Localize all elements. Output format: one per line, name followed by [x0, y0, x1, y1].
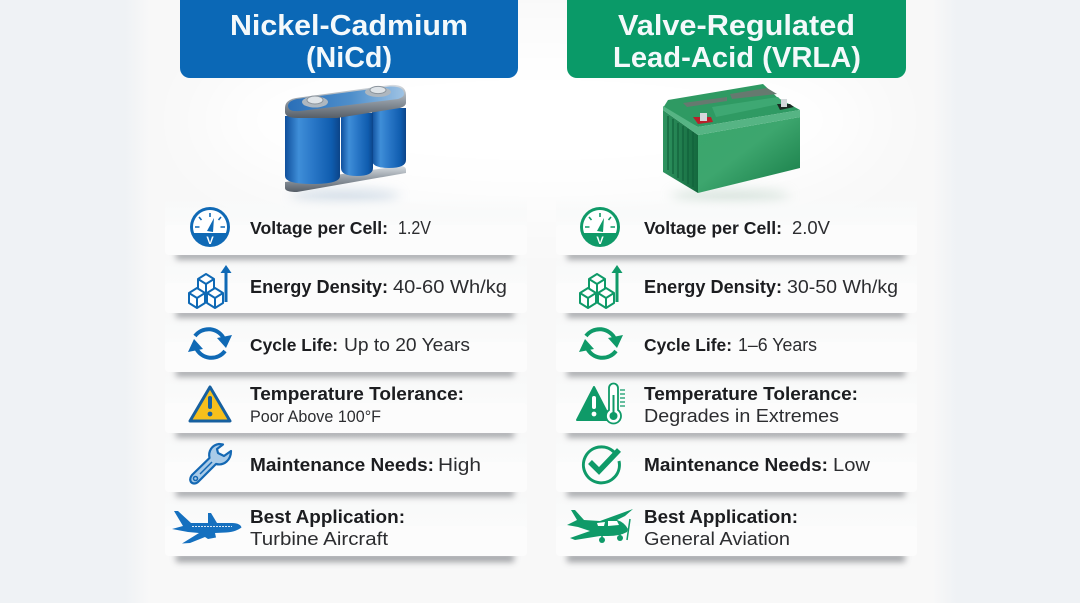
icon: cycle arrows: [188, 329, 232, 358]
row: Maintenance Needs: [165, 433, 527, 498]
row: Maintenance Needs: High: [438, 454, 481, 475]
icon: cubes with arrow: [189, 265, 232, 308]
row: Energy Density: [165, 255, 527, 319]
heading: Nickel-Cadmium: Nickel-Cadmium: [230, 10, 468, 42]
row: Voltage per Cell: Voltage per Cell:: [250, 218, 388, 238]
row: Voltage per Cell: [556, 197, 917, 261]
icon: VRLA battery: [663, 84, 800, 202]
row: Temperature Tolerance: Temperature Tolerance:: [250, 383, 464, 404]
row: Energy Density: Energy Density:: [250, 276, 388, 297]
row: Voltage per Cell: 1.2V: [398, 217, 432, 238]
panel: VRLA column: [556, 0, 917, 562]
row: Best Application: General Aviation: [644, 528, 790, 549]
row: Temperature Tolerance: [556, 372, 917, 439]
panel: NiCd column: [165, 0, 527, 562]
row: Temperature Tolerance: Temperature Tolerance:: [644, 383, 858, 404]
row: Cycle Life: 1–6 Years: [738, 334, 817, 355]
row: Energy Density: 30-50 Wh/kg: [787, 276, 898, 297]
icon: warning with thermometer: [577, 384, 625, 423]
heading: Valve-Regulated Lead-Acid: Lead-Acid (VRLA): [613, 42, 861, 74]
icon: cycle arrows: [579, 329, 623, 358]
row: Temperature Tolerance: [165, 372, 527, 439]
icon: warning triangle: [190, 387, 230, 421]
row: Cycle Life: [556, 313, 917, 378]
row: Best Application: Best Application:: [250, 506, 405, 527]
icon: NiCd battery: [285, 85, 406, 202]
row: Energy Density: Energy Density:: [644, 276, 782, 297]
row: Cycle Life: [165, 313, 527, 378]
row: Maintenance Needs: Low: [833, 454, 871, 475]
row: Voltage per Cell: Voltage per Cell:: [644, 218, 782, 238]
row: Cycle Life: Up to 20 Years: [344, 334, 470, 355]
icon: gauge: V: [596, 235, 604, 247]
icon: gauge: V: [206, 235, 214, 247]
icon: wrench: [190, 444, 231, 484]
row: Best Application: [165, 492, 527, 562]
row: Energy Density: [556, 255, 917, 319]
row: Best Application: [556, 492, 917, 562]
row: Temperature Tolerance: Poor Above 100°F: [250, 407, 381, 426]
heading: Valve-Regulated Lead-Acid: [567, 0, 906, 78]
row: Cycle Life: Cycle Life:: [250, 335, 338, 355]
row: Cycle Life: Cycle Life:: [644, 335, 732, 355]
row: Best Application: Turbine Aircraft: [250, 528, 388, 549]
icon: check circle: [583, 447, 619, 483]
row: Maintenance Needs: [556, 433, 917, 498]
row: Maintenance Needs: Maintenance Needs:: [250, 454, 434, 475]
heading: Nickel-Cadmium: (NiCd): [306, 42, 392, 74]
icon: gauge: [190, 207, 230, 247]
icon: gauge: [580, 207, 620, 247]
icon: airliner: [172, 511, 242, 544]
row: Best Application: Best Application:: [644, 506, 798, 527]
icon: light aircraft: [567, 509, 633, 543]
row: Maintenance Needs: Maintenance Needs:: [644, 454, 828, 475]
row: Voltage per Cell: 2.0V: [792, 217, 831, 238]
icon: cubes with arrow: [580, 265, 622, 308]
row: Temperature Tolerance: Degrades in Extremes: [644, 405, 839, 426]
heading: Valve-Regulated Lead-Acid: Valve-Regulated: [618, 10, 855, 42]
row: Voltage per Cell: [165, 197, 527, 261]
row: Energy Density: 40-60 Wh/kg: [393, 276, 507, 297]
heading: Nickel-Cadmium: [180, 0, 518, 78]
